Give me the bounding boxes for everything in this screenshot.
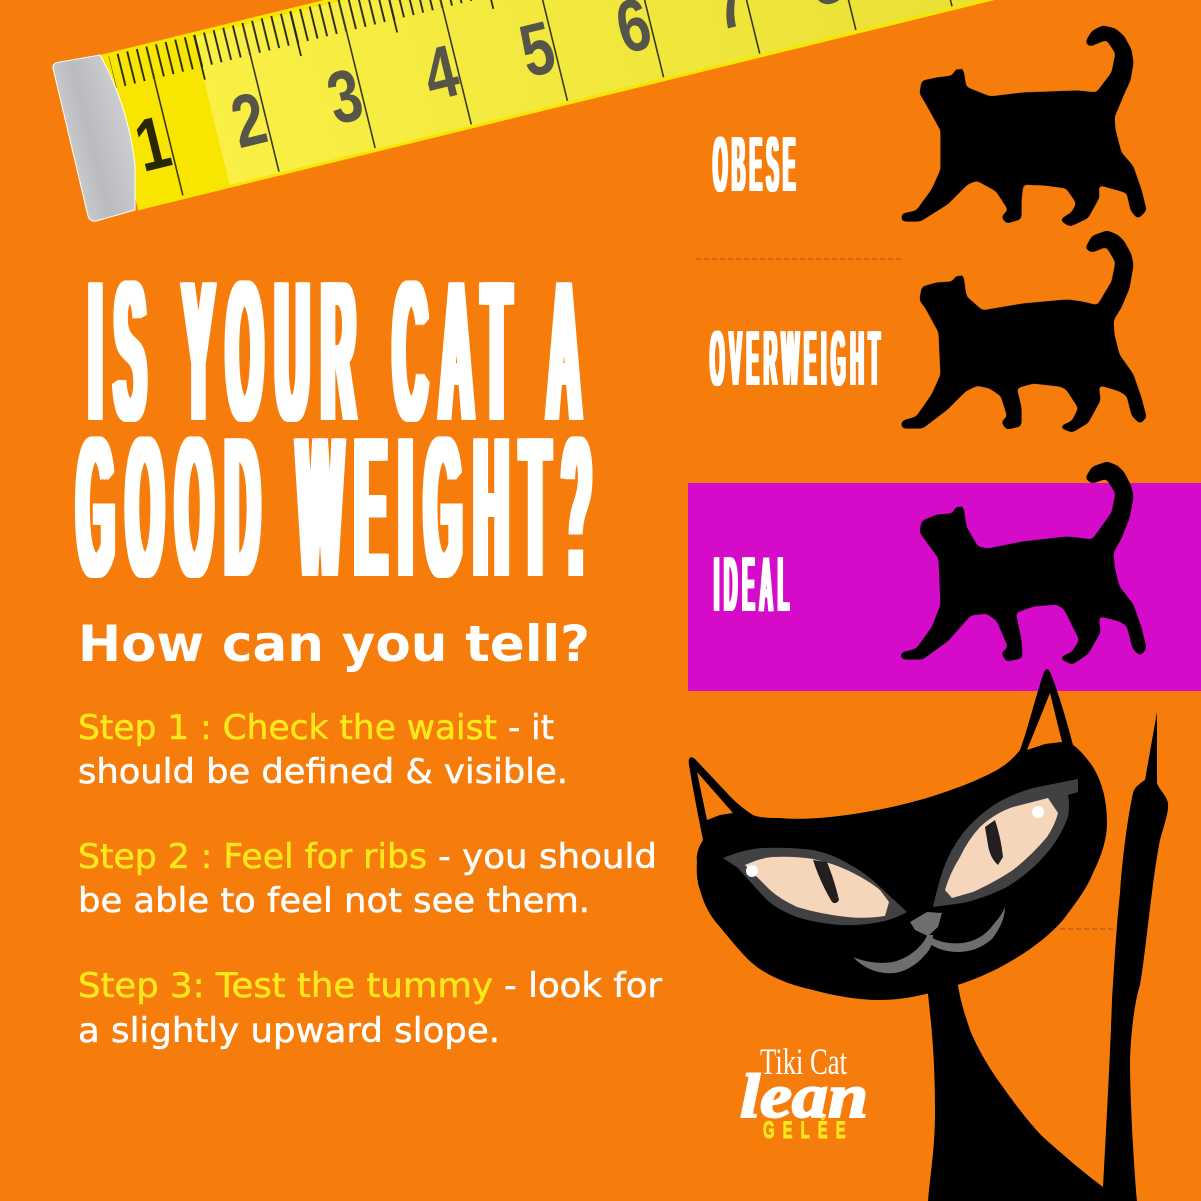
text block: step two	[78, 837, 657, 921]
icon: obese cat silhouette	[903, 27, 1145, 225]
tape numbers: 4	[416, 30, 467, 117]
text block: step two: Step 2 : Feel for ribs	[78, 837, 427, 877]
tape numbers: 1	[127, 101, 178, 188]
text block: step three: - look for	[504, 966, 662, 1006]
tape numbers: 2	[224, 77, 274, 165]
icon: ideal cat silhouette	[902, 463, 1145, 663]
tape numbers: 3	[320, 53, 371, 141]
text block: step three	[78, 966, 662, 1051]
text block: step one: should be defined & visible.	[78, 752, 568, 792]
title line two: GOOD WEIGHT?	[77, 396, 604, 619]
text block: step one: - it	[508, 708, 554, 748]
logo: Tiki Cat lean gelee: Tiki Cat	[760, 1042, 848, 1083]
cat ears inner	[697, 693, 1062, 820]
text block: step two: be able to feel not see them.	[78, 881, 590, 921]
title line one: IS YOUR CAT A	[89, 240, 593, 463]
divider lines	[696, 259, 1115, 929]
label: obese: OBESE	[713, 122, 800, 208]
panel: ideal highlight band	[688, 483, 1201, 691]
label: ideal: IDEAL	[714, 542, 793, 628]
text block: step one	[78, 708, 568, 792]
text block: step three: a slightly upward slope.	[78, 1011, 500, 1051]
tape numbers	[127, 0, 947, 188]
illustration: large black cat	[689, 669, 1168, 1201]
logo: Tiki Cat lean gelee: GELÉE	[763, 1116, 854, 1144]
label: overweight: OVERWEIGHT	[710, 316, 884, 402]
left eye	[723, 848, 907, 925]
tape numbers: 5	[512, 6, 563, 94]
text block: step one: Step 1 : Check the waist	[78, 708, 497, 748]
right eye	[933, 779, 1078, 907]
measuring tape	[53, 0, 1109, 221]
icon: overweight cat silhouette	[903, 232, 1145, 431]
nose and mouth	[853, 907, 1005, 973]
logo: Tiki Cat lean gelee	[740, 1042, 868, 1144]
text block: step two: - you should	[438, 837, 657, 877]
logo: Tiki Cat lean gelee: lean	[740, 1063, 868, 1131]
text block: step three: Step 3: Test the tummy	[78, 966, 493, 1006]
heading: how can you tell: How can you tell?	[78, 615, 590, 673]
